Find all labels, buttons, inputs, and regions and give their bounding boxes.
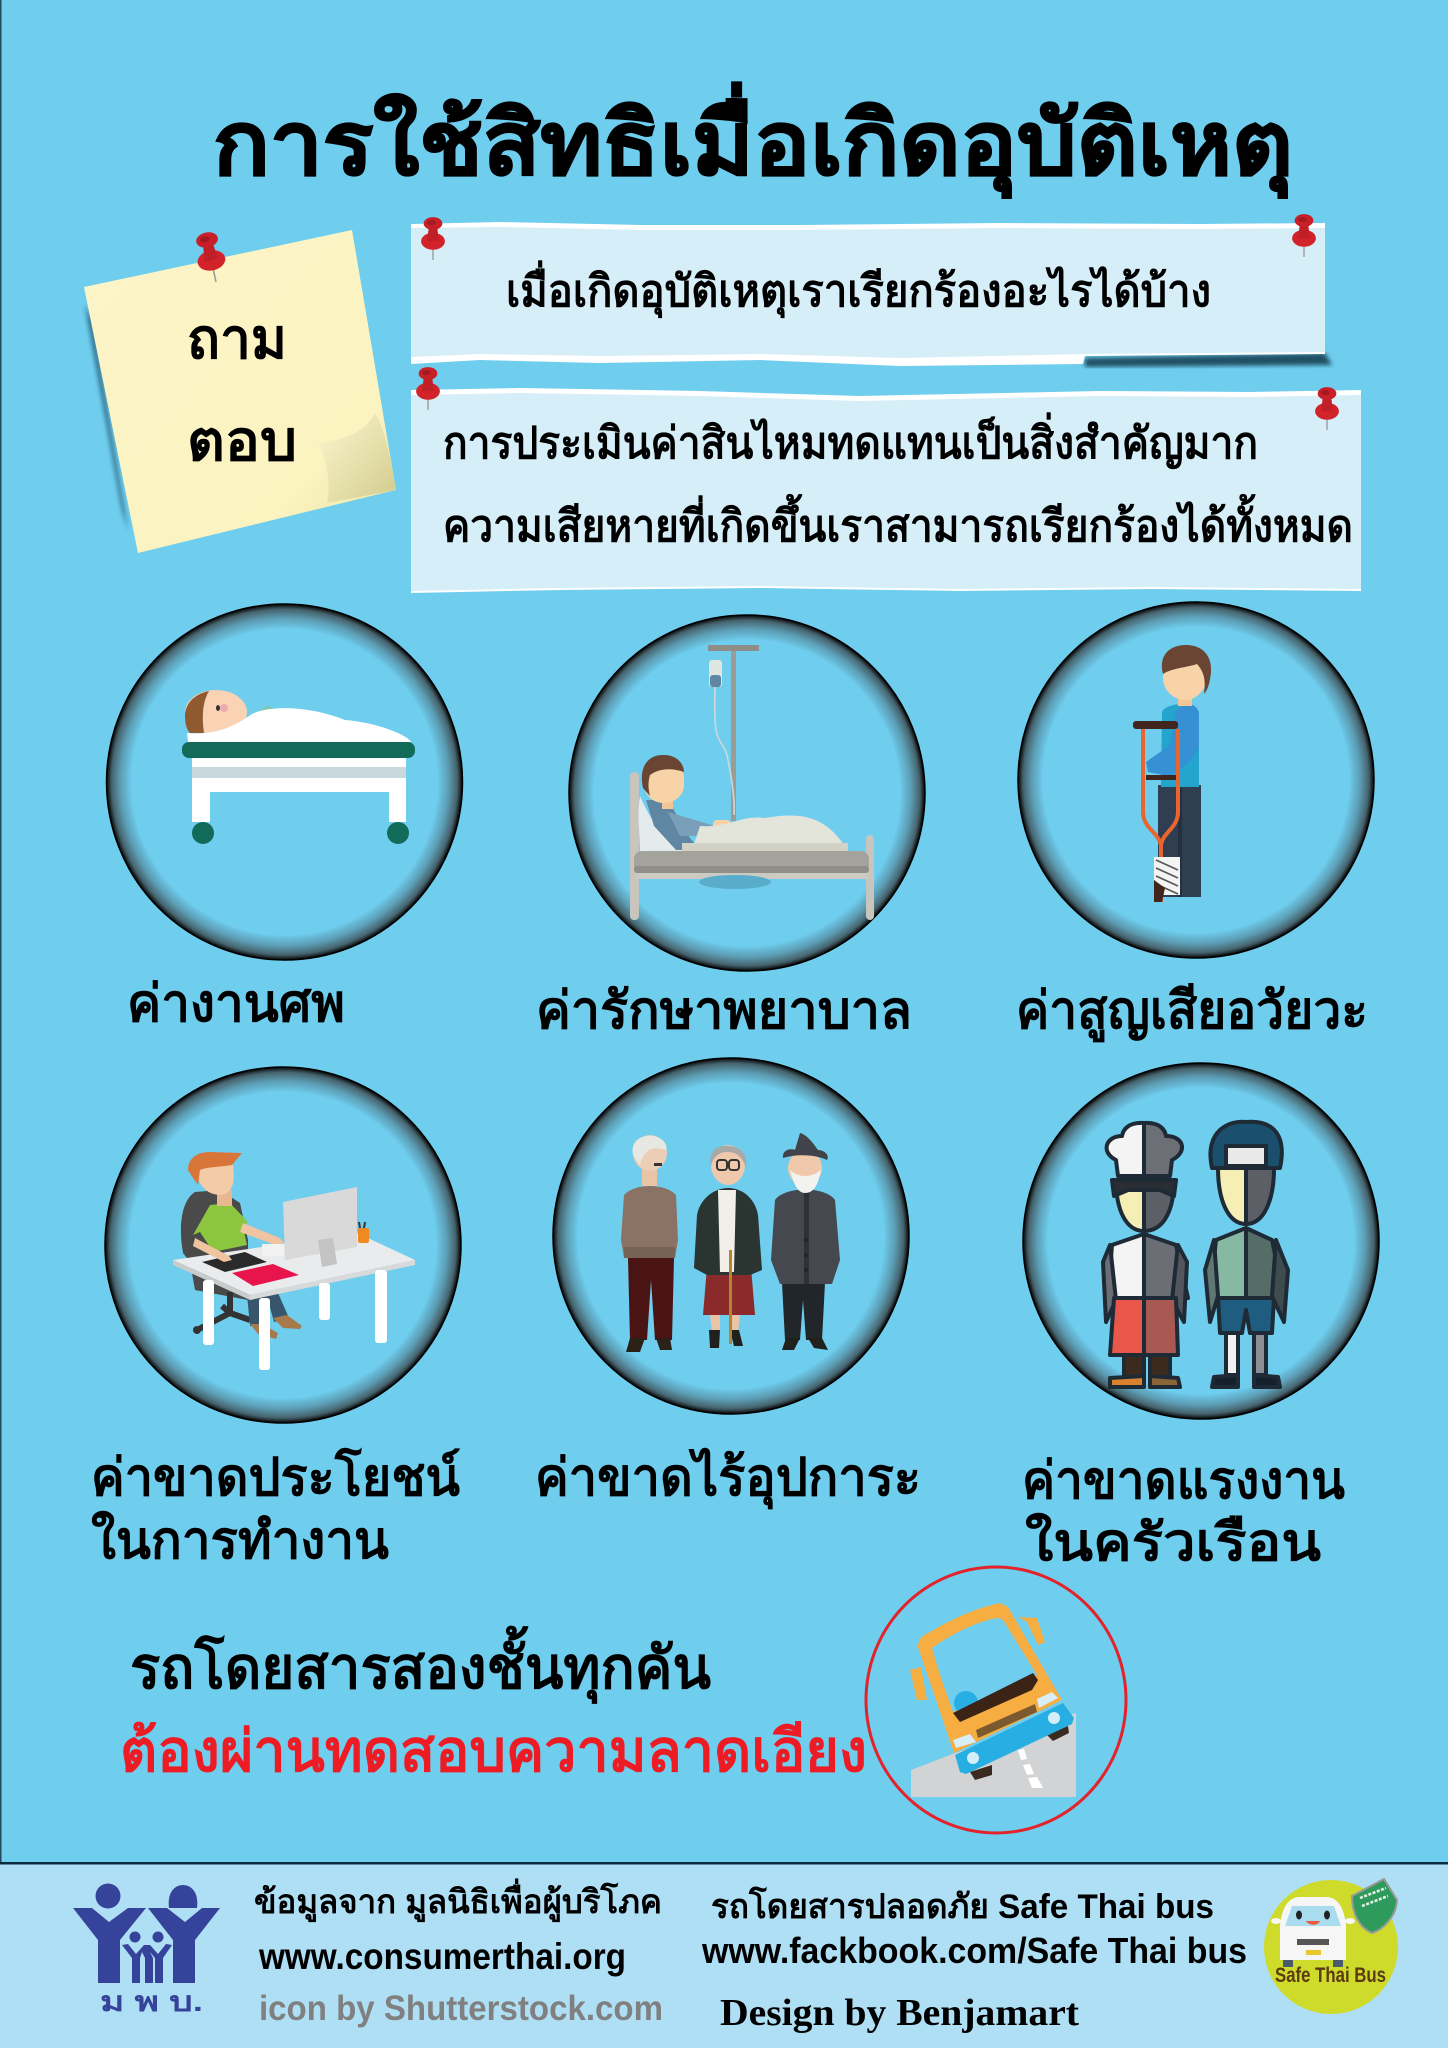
label: lost household labour: ค่าขาดแรงงาน [1022,1452,1345,1510]
label: lost household labour: ในครัวเรือน [1025,1512,1321,1572]
label: funeral cost: ค่างานศพ [127,975,345,1033]
logo caption: ม พ บ. [100,1986,203,2017]
label: medical cost: ค่ารักษาพยาบาล [536,982,912,1040]
panel: sticky note [84,230,396,553]
icon: person on crutch [1133,645,1211,902]
callout: double decker tilt test [120,1626,867,1784]
icon: tilted bus on slope [866,1567,1126,1833]
question text: เมื่อเกิดอุบัติเหตุเราเรียกร้องอะไรได้บ้าง [506,260,1211,319]
icon: three elderly people [621,1133,840,1352]
circle: medical cost [569,615,925,971]
title: การใช้สิทธิเมื่อเกิดอุบัติเหตุ [213,82,1293,199]
answer label: ตอบ [187,409,297,472]
circle: loss of support [553,1058,909,1414]
icon: chef and policeman [1103,1122,1288,1387]
icon: patient on stretcher [182,690,415,844]
label: loss of support: ค่าขาดไร้อุปการะ [535,1447,921,1510]
panel: answer banner [411,367,1361,593]
question label: ถาม [187,307,287,370]
answer text line 2: ความเสียหายที่เกิดขึ้นเราสามารถเรียกร้องได้ทั้งหมด [443,493,1353,551]
design credit: Design by Benjamart [720,1992,1079,2034]
icon: Safe Thai Bus logo [1264,1879,1398,2014]
icon: left pin [416,367,440,410]
label: lost household labour [1022,1452,1345,1572]
campaign url: www.fackbook.com/Safe Thai bus [701,1930,1247,1971]
label: loss of organ: ค่าสูญเสียอวัยวะ [1016,982,1368,1043]
callout: double decker tilt test: ต้องผ่านทดสอบความลาดเอียง [120,1719,867,1784]
source text: ข้อมูลจาก มูลนิธิเพื่อผู้บริโภค [254,1878,662,1923]
icon: MPB foundation logo [73,1884,220,2017]
icon credit: icon by Shutterstock.com [259,1989,663,2028]
source website: www.consumerthai.org [258,1936,626,1977]
icon: left pin [421,217,445,260]
logo wordmark: Safe Thai Bus [1275,1964,1386,1987]
circle: lost work benefit [105,1067,461,1423]
icon: man at desk [173,1152,415,1370]
circle: funeral cost [106,604,462,960]
circle: lost household labour [1023,1063,1379,1419]
icon: right pin [1315,387,1339,430]
label: lost work benefit: ค่าขาดประโยชน์ [91,1446,461,1507]
icon: patient in hospital bed [630,645,874,920]
answer text line 1: การประเมินค่าสินไหมทดแทนเป็นสิ่งสำคัญมาก [443,412,1258,469]
page curl [318,413,396,503]
campaign text: รถโดยสารปลอดภัย Safe Thai bus [711,1886,1214,1926]
label: lost work benefit: ในการทำงาน [91,1510,389,1570]
label: lost work benefit [91,1446,461,1570]
icon: note pin [192,230,230,285]
panel: question banner [411,214,1332,367]
callout: double decker tilt test: รถโดยสารสองชั้นทุกคัน [130,1626,711,1705]
footer panel [0,1862,1448,2048]
circle: loss of organ [1018,602,1374,958]
icon: right pin [1292,214,1316,257]
